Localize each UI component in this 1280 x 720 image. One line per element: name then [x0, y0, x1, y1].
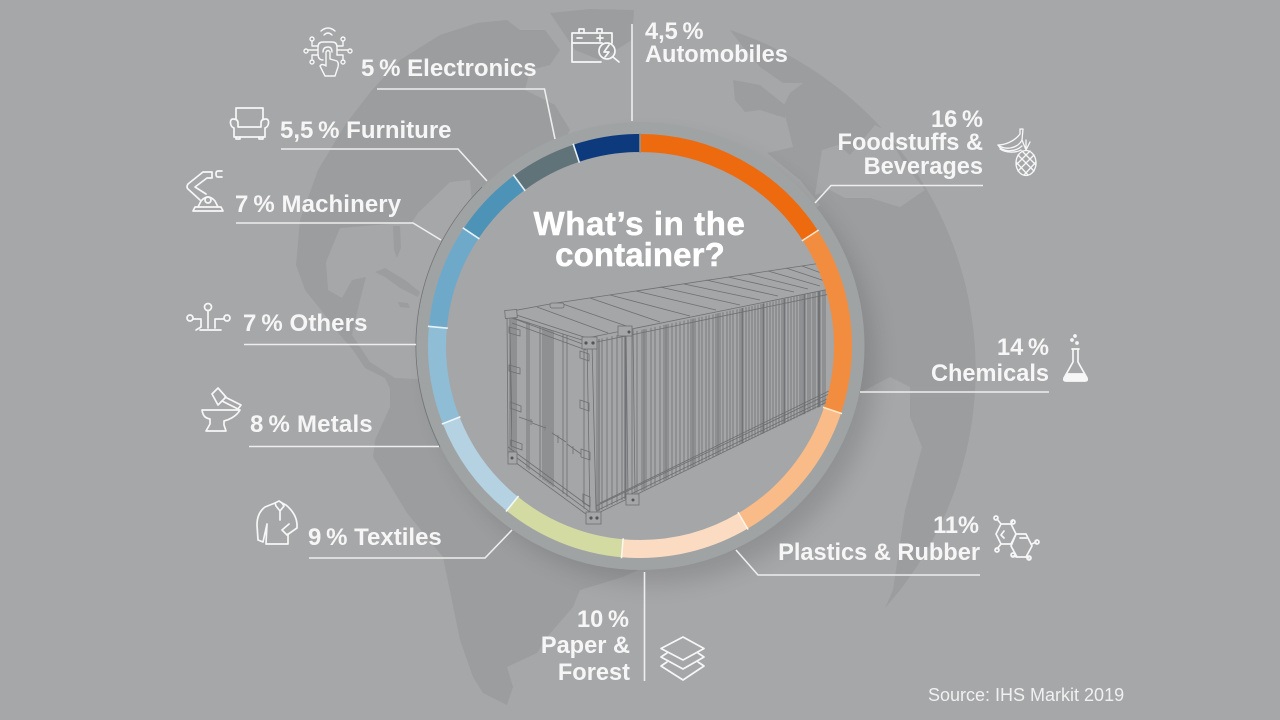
label: 11 % Plastics & Rubber [736, 513, 1039, 575]
icon: touch circuit [304, 28, 352, 76]
label: 10 % Paper & Forest: Paper & [541, 633, 630, 659]
title [534, 205, 745, 273]
icon: banana and pineapple [998, 129, 1036, 176]
globe map [296, 9, 976, 705]
central disc [416, 122, 864, 570]
title: container? [555, 236, 725, 273]
label: 5 % Electronics [304, 28, 555, 139]
label: 4,5 % Automobiles: 4,5 % [645, 19, 704, 45]
label: 10 % Paper & Forest [541, 572, 704, 686]
donut chart [437, 143, 843, 549]
icon: shirt [257, 501, 297, 544]
label: 16 % Foodstuffs & Beverages [815, 107, 1036, 203]
container corrugated side [597, 280, 825, 520]
icon: connected nodes [187, 304, 230, 330]
label: 7 % Machinery: 7 % Machinery [235, 191, 402, 218]
container rails and posts [587, 293, 835, 517]
label: 16 % Foodstuffs & Beverages: Beverages [864, 154, 983, 180]
container roof [507, 261, 835, 342]
label: 4,5 % Automobiles: Automobiles [645, 42, 788, 68]
label: 10 % Paper & Forest: Forest [558, 660, 630, 686]
label: 11 % Plastics & Rubber: 11% [933, 513, 979, 539]
label: 7 % Others: 7 % Others [243, 310, 368, 337]
icon: car battery [572, 29, 619, 62]
label: 7 % Others [187, 304, 416, 344]
label: 5 % Electronics: 5 % Electronics [361, 55, 537, 82]
label: 5,5 % Furniture: 5,5 % Furniture [280, 117, 452, 144]
label: 16 % Foodstuffs & Beverages: Foodstuffs & [838, 130, 983, 156]
label: 4,5 % Automobiles [572, 19, 788, 121]
icon: hammer and anvil [202, 388, 241, 431]
label: 14 % Chemicals: Chemicals [931, 361, 1049, 387]
label: 11 % Plastics & Rubber: Plastics & Rubber [778, 540, 980, 566]
icon: molecule [994, 516, 1039, 560]
label: 10 % Paper & Forest: 10 % [577, 607, 629, 633]
icon: flask [1064, 335, 1087, 381]
source note: Source: IHS Markit 2019 [928, 685, 1124, 705]
icon: robot arm [187, 171, 223, 211]
label: 9 % Textiles: 9 % Textiles [308, 524, 442, 551]
label: 14 % Chemicals: 14 % [997, 335, 1049, 361]
icon: armchair [230, 108, 269, 139]
label: 8 % Metals: 8 % Metals [250, 411, 373, 438]
label: 5,5 % Furniture [230, 108, 487, 181]
label: 14 % Chemicals [860, 335, 1087, 392]
label: 16 % Foodstuffs & Beverages: 16 % [931, 107, 983, 133]
label: 7 % Machinery [187, 171, 441, 240]
label: 9 % Textiles [257, 501, 512, 558]
label: 8 % Metals [202, 388, 439, 446]
donut segment separators [428, 133, 842, 558]
shipping container illustration [505, 261, 835, 524]
container doors [507, 300, 590, 520]
title: What’s in the [534, 205, 745, 242]
container corner castings [505, 303, 639, 524]
circle drop shadow [432, 139, 876, 583]
icon: paper stack [661, 637, 704, 680]
